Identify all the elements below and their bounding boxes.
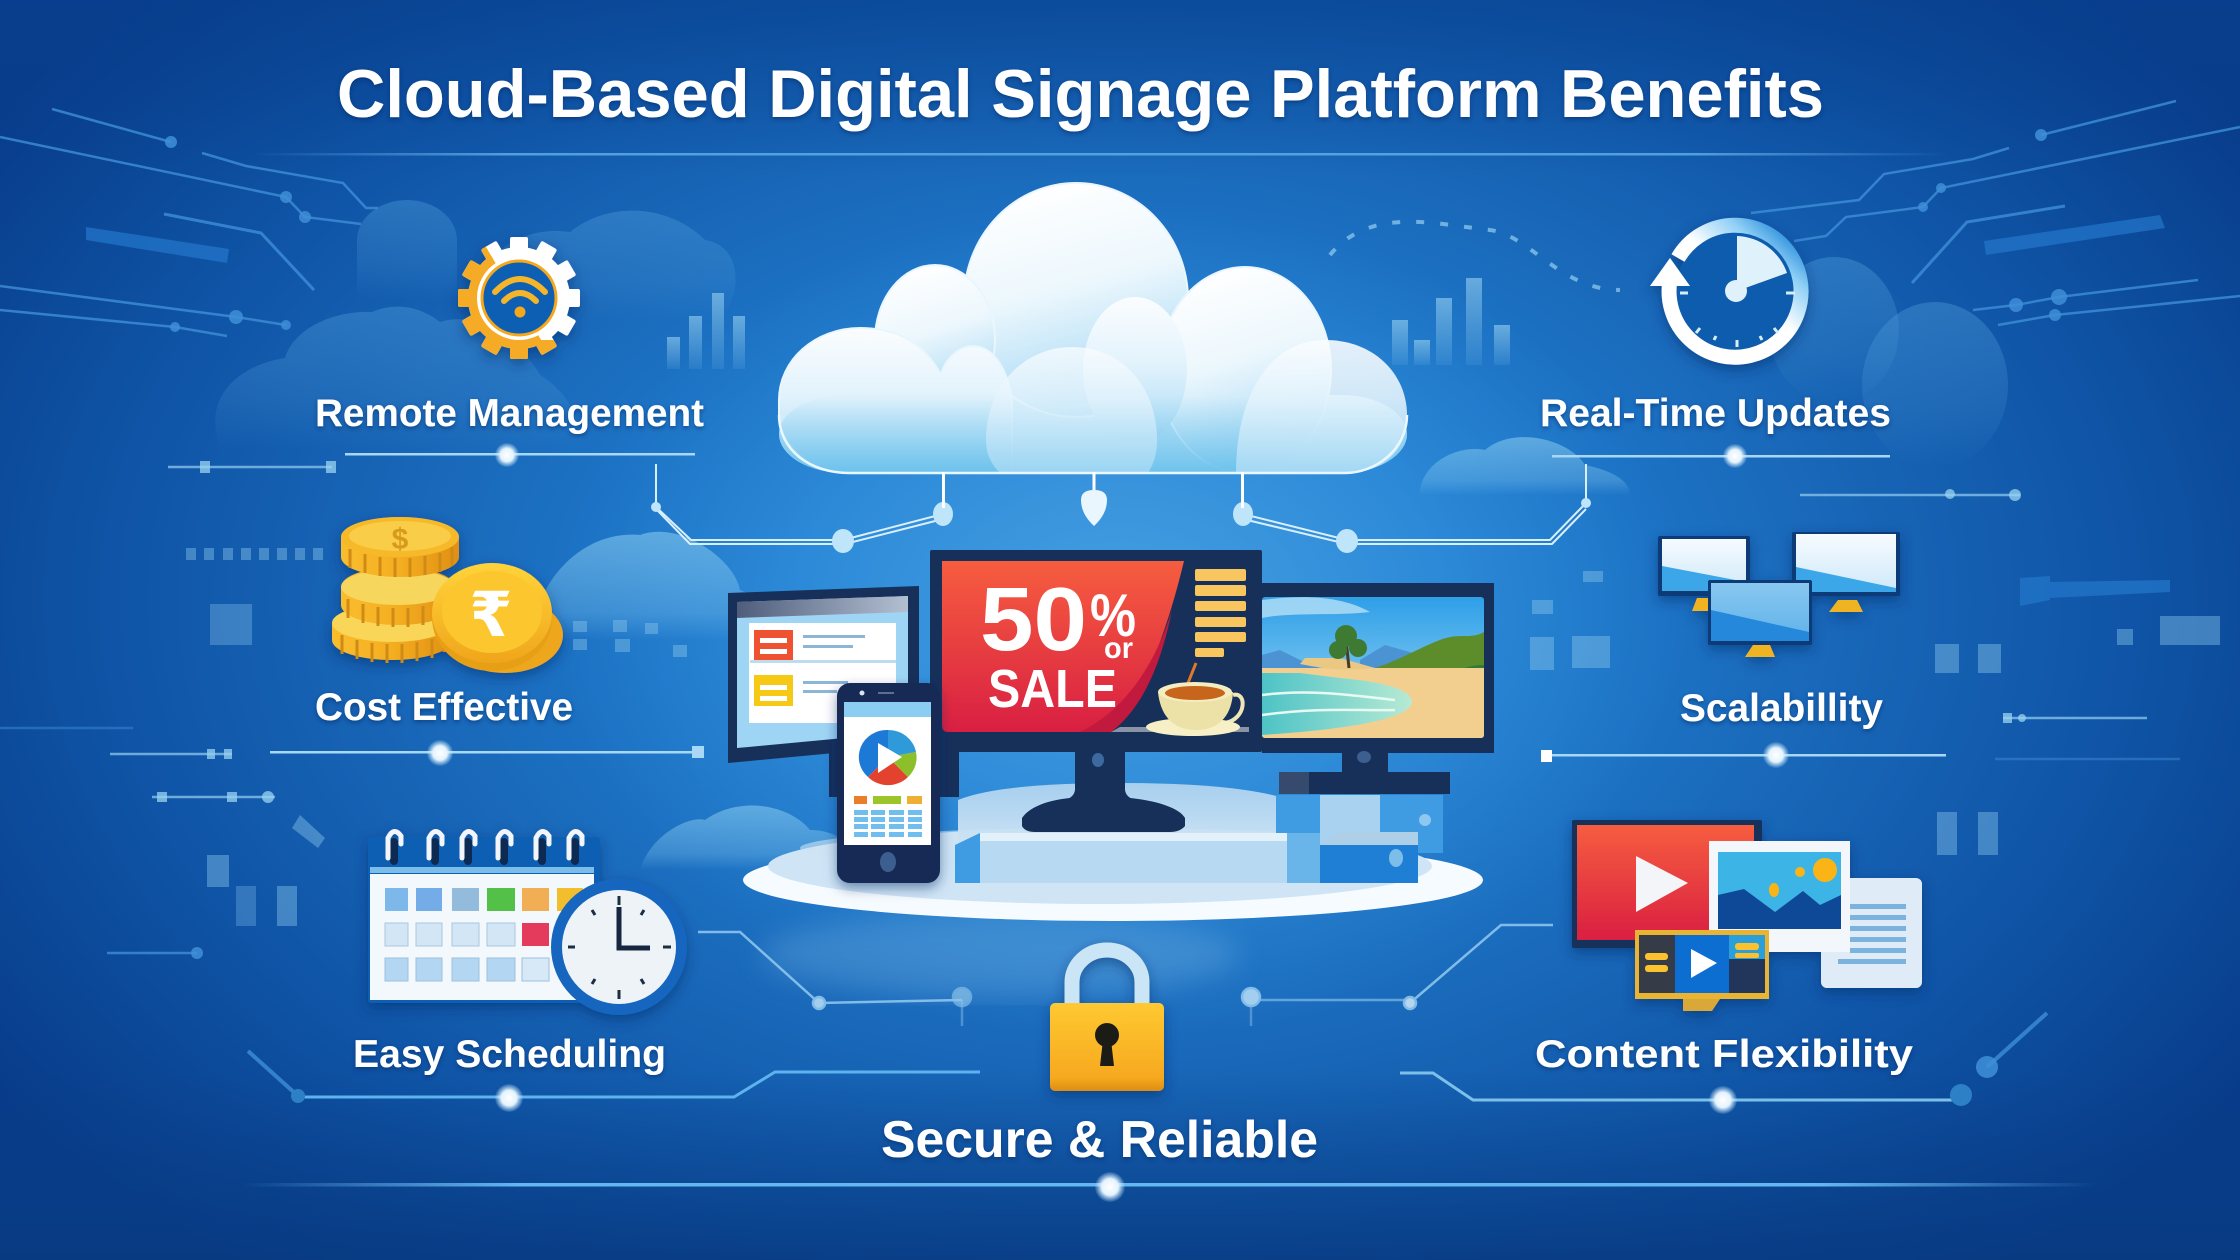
- document: [1821, 878, 1922, 988]
- icon: content flexibility: [1572, 820, 1922, 1011]
- background squares: [186, 548, 2220, 926]
- bottom divider: [240, 1172, 2100, 1202]
- main monitor: or: [1104, 632, 1133, 665]
- icon: coins: $: [392, 523, 409, 556]
- divider: real-time updates: [1552, 444, 1890, 468]
- title underline: [250, 153, 1950, 156]
- blue boxes on platform: [955, 795, 1443, 883]
- main monitor: %: [1090, 582, 1136, 649]
- coffee cup: [1111, 663, 1249, 736]
- icon: calendar and clock: [368, 831, 687, 1015]
- label: secure and reliable: Secure & Reliable: [881, 1111, 1318, 1169]
- label: remote management: Remote Management: [315, 392, 704, 435]
- label: content flexibility: Content Flexibility: [1535, 1033, 1913, 1076]
- lock side circuits: [698, 925, 1553, 1026]
- beach screen: [1262, 597, 1484, 738]
- background circuit lines: [0, 101, 2240, 1096]
- icon: coins: [332, 517, 563, 673]
- label: easy scheduling: Easy Scheduling: [353, 1033, 666, 1076]
- image card: [1709, 841, 1850, 952]
- divider: easy scheduling: [291, 1072, 980, 1112]
- right monitor: [1262, 583, 1494, 794]
- left monitor: [728, 586, 959, 797]
- main monitor: [930, 550, 1262, 832]
- cloud connectors: [651, 464, 1591, 553]
- background clouds: [215, 200, 2008, 870]
- label: scalability: Scalabillity: [1680, 687, 1883, 730]
- platform: [743, 783, 1483, 997]
- title: Cloud-Based Digital Signage Platform Benefits: [337, 56, 1824, 132]
- small monitor: [1635, 930, 1769, 1011]
- background light circuit lines: [110, 222, 2147, 797]
- background thick bars: [86, 215, 2170, 606]
- icon: real-time updates clock: [1650, 225, 1801, 357]
- divider: remote management: [345, 443, 695, 467]
- label: real-time updates: Real-Time Updates: [1540, 392, 1891, 435]
- main monitor: 50: [980, 570, 1087, 670]
- icon: scalability monitors: [1658, 532, 1900, 657]
- divider: content flexibility: [1400, 1073, 1972, 1114]
- icon: padlock: [1050, 950, 1164, 1091]
- sale panel: [942, 561, 1184, 732]
- background nodes: [165, 129, 2067, 1078]
- main monitor: SALE: [988, 659, 1117, 719]
- divider: scalability: [1541, 742, 1946, 768]
- icon: remote management gear: [458, 237, 580, 359]
- cloud: [779, 183, 1407, 473]
- phone: [837, 683, 940, 883]
- label: cost effective: Cost Effective: [315, 686, 573, 729]
- video window: [1572, 820, 1762, 948]
- icon: coins: ₹: [469, 581, 513, 650]
- pie play logo: [859, 730, 917, 785]
- divider: cost effective: [270, 740, 704, 766]
- background bars: [667, 278, 1510, 369]
